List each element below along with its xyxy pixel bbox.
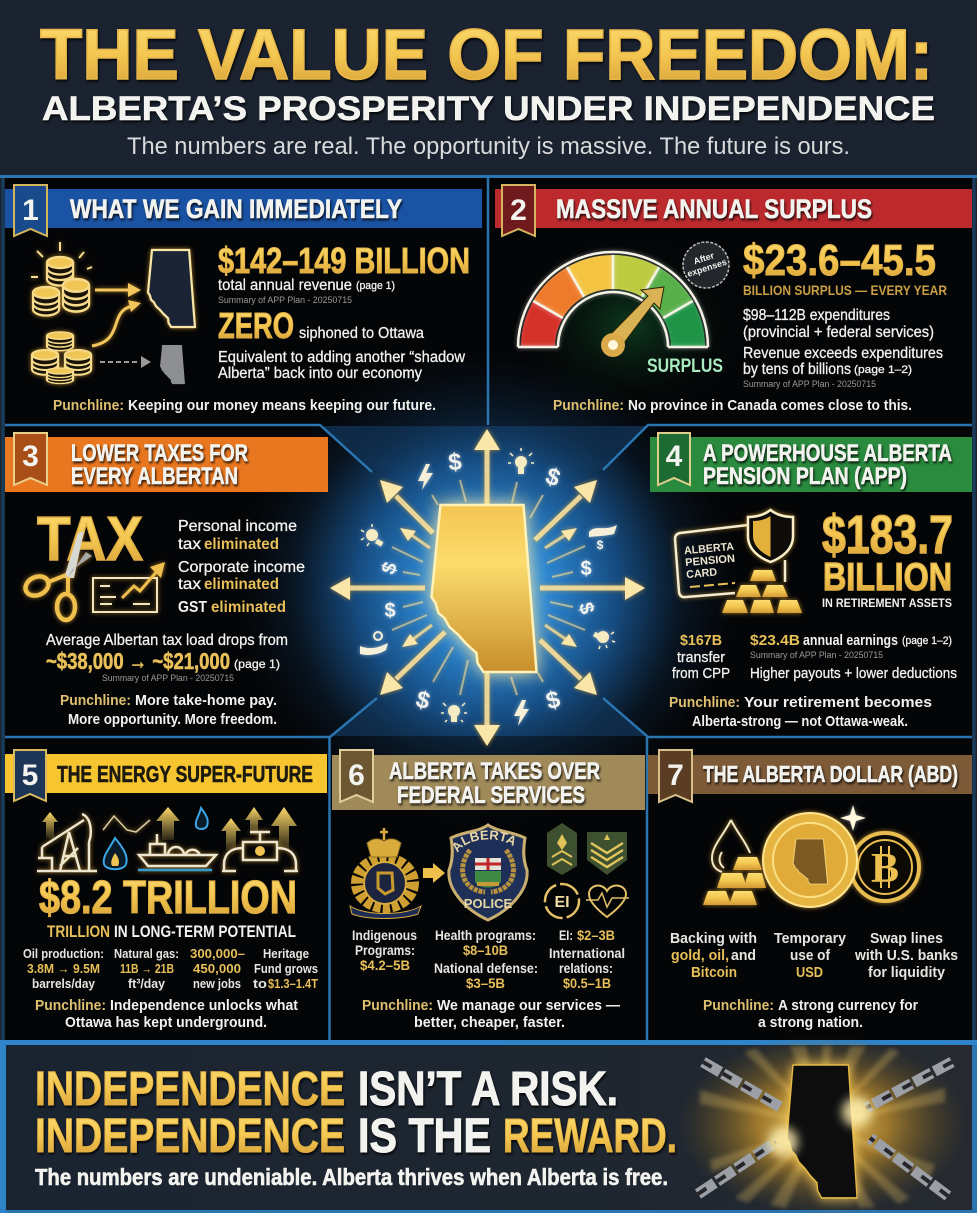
pension details: $167B <box>680 632 722 649</box>
services text <box>352 927 625 991</box>
pension figure: IN RETIREMENT ASSETS <box>822 596 952 610</box>
surplus details: by tens of billions <box>743 361 851 378</box>
pension details: annual earnings <box>803 632 898 649</box>
punchline 3 <box>60 692 277 728</box>
pension details: $23.4B <box>750 632 800 649</box>
surplus details: $98–112B expenditures <box>743 307 890 324</box>
heading bar 3 <box>5 433 328 492</box>
heading bar 5 <box>5 750 327 801</box>
services text: relations: <box>559 960 613 976</box>
small icons: $ <box>597 538 604 552</box>
tax eliminated list: Personal income <box>178 518 297 535</box>
icon: shadow Alberta <box>100 345 185 384</box>
heading bar 6: FEDERAL SERVICES <box>397 782 585 809</box>
revenue text: total annual revenue <box>218 277 352 294</box>
badge: after expenses: expenses <box>686 257 728 279</box>
small icons: $ <box>413 686 433 715</box>
surplus caption: BILLION SURPLUS — EVERY YEAR <box>743 282 947 298</box>
dollar text: gold, oil, <box>671 947 729 964</box>
small icons: $ <box>580 558 592 580</box>
zero siphoned <box>218 305 424 346</box>
tax load text: ~$38,000 → ~$21,000 <box>46 648 230 674</box>
services text: Programs: <box>355 942 415 958</box>
panel 6: federal services <box>332 749 645 1031</box>
closing headline <box>35 1063 677 1163</box>
energy stats: 450,000 <box>193 961 241 976</box>
shadow Alberta text: Equivalent to adding another “shadow <box>218 349 465 366</box>
small icons: $ <box>542 462 564 493</box>
icon: bitcoin coin: B <box>871 846 899 892</box>
title: THE VALUE OF FREEDOM: <box>40 16 933 95</box>
pension details: (page 1–2) <box>902 635 952 647</box>
trillion caption: IN LONG-TERM POTENTIAL <box>114 922 296 941</box>
heading bar 7: 7 <box>667 759 684 792</box>
icon: scissors <box>22 531 92 620</box>
heading bar 2 <box>495 185 972 236</box>
icon: pension card: PENSION <box>685 553 736 569</box>
closing tagline: The numbers are undeniable. Alberta thrives when Alberta is free. <box>35 1164 668 1190</box>
icon: bitcoin coin <box>851 833 919 901</box>
trillion caption: TRILLION <box>47 922 110 941</box>
revenue figure: $142–149 BILLION <box>218 240 470 281</box>
panel 3: lower taxes <box>5 433 328 728</box>
small icons: $ <box>378 559 402 577</box>
small icons: $ <box>447 448 464 477</box>
heading bar 2: 2 <box>510 194 527 227</box>
heading bar 5: THE ENERGY SUPER-FUTURE <box>57 761 313 787</box>
icon: coins into Alberta <box>31 242 195 384</box>
icon: EI and health <box>545 884 629 918</box>
surplus details: Summary of APP Plan - 20250715 <box>743 379 876 389</box>
punchline 1: Punchline: <box>53 397 124 414</box>
icon: gold bars <box>722 570 802 613</box>
energy stats: Heritage <box>263 946 309 961</box>
icon: pension card: CARD <box>686 566 718 581</box>
dollar text: use of <box>790 947 831 964</box>
heading bar 3: 3 <box>22 440 39 473</box>
pension details: Summary of APP Plan - 20250715 <box>750 650 883 660</box>
centre: glowing Alberta with arrows <box>330 429 645 746</box>
icon: Alberta police shield: POLICE <box>464 896 513 911</box>
heading bar 3: EVERY ALBERTAN <box>71 463 238 490</box>
punchline 7: Punchline: <box>703 997 774 1014</box>
small icons: $ <box>543 686 564 715</box>
tax load text: Average Albertan tax load drops from <box>46 632 288 649</box>
icon: oil drop and gold <box>703 820 766 905</box>
heading bar 2: MASSIVE ANNUAL SURPLUS <box>556 194 872 224</box>
services text: $3–5B <box>466 975 505 991</box>
energy stats: 3.8M → 9.5M <box>27 961 100 976</box>
heading bar 1: WHAT WE GAIN IMMEDIATELY <box>70 194 402 224</box>
energy stats: 300,000– <box>190 946 245 961</box>
header <box>40 16 935 160</box>
punchline 2: No province in Canada comes close to this. <box>628 397 912 414</box>
revenue text <box>218 277 395 305</box>
tax eliminated list: GST <box>178 599 207 616</box>
dollar text: USD <box>796 964 823 981</box>
energy stats: ft³/day <box>128 976 166 991</box>
icon: pension card <box>675 525 785 597</box>
heading bar 4 <box>650 433 972 492</box>
badge: after expenses: After <box>692 250 716 266</box>
punchline 6: better, cheaper, faster. <box>414 1014 565 1031</box>
small icons <box>360 448 617 726</box>
revenue text: Summary of APP Plan - 20250715 <box>218 295 352 305</box>
pension details: from CPP <box>672 665 730 682</box>
dollar text: and <box>731 947 756 964</box>
tax eliminated list <box>178 518 305 616</box>
services text: $0.5–1B <box>563 975 611 991</box>
tax load text <box>46 632 288 683</box>
energy stats: to <box>253 976 267 991</box>
panel backgrounds <box>0 175 977 1040</box>
subtitle: ALBERTA’S PROSPERITY UNDER INDEPENDENCE <box>42 90 935 128</box>
punchline 5: Ottawa has kept underground. <box>65 1014 267 1031</box>
punchline 4: Your retirement becomes <box>744 695 932 711</box>
punchline 4 <box>669 694 932 730</box>
tax eliminated list: tax <box>178 576 201 593</box>
icon: Alberta police shield <box>447 823 529 922</box>
heading bar 5: 5 <box>22 759 38 792</box>
badge: after expenses <box>683 242 729 288</box>
tax eliminated list: eliminated <box>211 599 286 616</box>
surplus details: (page 1–2) <box>854 364 912 376</box>
tax load text: Summary of APP Plan - 20250715 <box>102 673 234 683</box>
pension details <box>672 632 957 682</box>
heading bar 7 <box>648 750 972 802</box>
pension figure <box>822 505 953 610</box>
punchline 3: Punchline: <box>60 692 131 709</box>
heading bar 6 <box>332 750 645 810</box>
panel 2: massive annual surplus <box>495 185 972 420</box>
punchline 2: Punchline: <box>553 397 624 414</box>
heading bar 1 <box>5 185 482 236</box>
pension figure: BILLION <box>823 556 952 599</box>
punchline 3: More take-home pay. <box>135 692 277 709</box>
punchline 7: A strong currency for <box>778 997 918 1014</box>
services text: $2–3B <box>577 927 615 943</box>
services text: National defense: <box>434 960 538 976</box>
icon: pension card: ALBERTA <box>684 541 735 557</box>
panel 1: what we gain immediately <box>5 185 482 414</box>
panel 7: Alberta dollar <box>648 750 972 1031</box>
closing headline: ISN’T A RISK. <box>358 1063 618 1116</box>
gauge label: SURPLUS <box>647 356 723 377</box>
icon: cheque with arrow <box>93 562 165 612</box>
punchline 6 <box>362 997 620 1031</box>
arrows <box>330 429 645 746</box>
heading bar 4: PENSION PLAN (APP) <box>703 463 907 490</box>
heading bar 6: ALBERTA TAKES OVER <box>389 758 600 785</box>
icon: tax word: TAX <box>37 505 143 574</box>
punchline 1: Keeping our money means keeping our future. <box>128 397 436 414</box>
zero siphoned: ZERO <box>218 305 294 346</box>
heading bar 3: LOWER TAXES FOR <box>71 440 248 467</box>
energy stats: barrels/day <box>32 976 96 991</box>
tax eliminated list: tax <box>178 536 201 553</box>
energy stats: 11B → 21B <box>120 961 174 976</box>
heading bar 4: 4 <box>666 440 683 473</box>
icon: Alberta police shield: ALBERTA <box>453 830 514 852</box>
surplus figure: $23.6–45.5 <box>743 236 936 285</box>
dollar text: Temporary <box>774 930 847 947</box>
trillion caption <box>47 922 296 941</box>
shadow Alberta text: Alberta” back into our economy <box>218 365 422 382</box>
trillion figure: $8.2 TRILLION <box>39 871 297 923</box>
dollar text: Bitcoin <box>691 964 737 981</box>
icon: RCMP crest <box>350 828 421 918</box>
tagline: The numbers are real. The opportunity is massive. The future is ours. <box>127 133 850 160</box>
dollar text: Backing with <box>670 930 757 947</box>
pension details: transfer <box>677 649 725 666</box>
icon: shield <box>748 510 793 562</box>
services text: Health programs: <box>435 927 536 943</box>
dollar text: Swap lines <box>870 930 943 947</box>
closing headline: INDEPENDENCE <box>35 1063 345 1116</box>
dollar text: with U.S. banks <box>854 947 958 964</box>
heading bar 1: 1 <box>22 194 39 227</box>
shadow Alberta text <box>218 349 465 382</box>
services text: $8–10B <box>463 942 508 958</box>
tax eliminated list: Corporate income <box>178 559 305 576</box>
surplus details: Revenue exceeds expenditures <box>743 345 943 362</box>
surplus details: (provincial + federal services) <box>743 324 934 341</box>
icon: sparkle <box>840 805 866 831</box>
pension details: Higher payouts + lower deductions <box>750 665 957 682</box>
punchline 5: Punchline: <box>35 997 106 1014</box>
energy stats: new jobs <box>193 976 241 991</box>
icon: military insignia <box>547 823 627 875</box>
punchline 5 <box>35 997 298 1031</box>
illustration: broken chains <box>677 1035 967 1213</box>
revenue text: (page 1) <box>356 280 395 292</box>
services text: $4.2–5B <box>360 957 410 973</box>
chart: surplus gauge <box>505 230 755 420</box>
icon: EI and health: EI <box>554 894 570 911</box>
punchline 4: Punchline: <box>669 694 740 711</box>
footer banner <box>0 1035 977 1213</box>
punchline 7: a strong nation. <box>758 1014 863 1031</box>
closing headline: INDEPENDENCE <box>35 1110 345 1163</box>
dollar text: for liquidity <box>868 964 946 981</box>
dollar text <box>670 930 958 981</box>
panel 5: energy super-future <box>5 750 327 1031</box>
punchline 3: More opportunity. More freedom. <box>68 711 277 728</box>
energy stats: Natural gas: <box>114 946 179 961</box>
energy stats: Oil production: <box>23 946 104 961</box>
tax eliminated list: eliminated <box>204 576 279 593</box>
punchline 7 <box>703 997 918 1031</box>
services text: Indigenous <box>352 927 417 943</box>
energy stats: $1.3–1.4T <box>268 976 318 991</box>
panel 4: pension plan <box>650 433 972 730</box>
closing headline: REWARD. <box>503 1110 677 1163</box>
icon: energy row <box>37 807 298 871</box>
small icons: $ <box>384 600 396 622</box>
tax eliminated list: eliminated <box>204 536 279 553</box>
tax load text: (page 1) <box>234 657 280 671</box>
surplus details <box>743 307 943 389</box>
closing headline: IS THE <box>358 1110 491 1163</box>
zero siphoned: siphoned to Ottawa <box>299 325 424 342</box>
punchline 6: We manage our services — <box>437 997 620 1014</box>
small icons: $ <box>574 600 598 616</box>
icon: Alberta gold <box>432 505 536 672</box>
arrow <box>423 863 445 883</box>
punchline 6: Punchline: <box>362 997 433 1014</box>
services text: International <box>549 945 625 961</box>
heading bar 6: 6 <box>348 759 365 792</box>
punchline 4: Alberta-strong — not Ottawa-weak. <box>692 713 908 730</box>
icon: Alberta coin <box>763 813 857 907</box>
energy stats: Fund grows <box>254 961 318 976</box>
punchline 5: Independence unlocks what <box>110 997 298 1014</box>
energy stats <box>23 946 318 991</box>
services text: EI: <box>559 927 573 943</box>
